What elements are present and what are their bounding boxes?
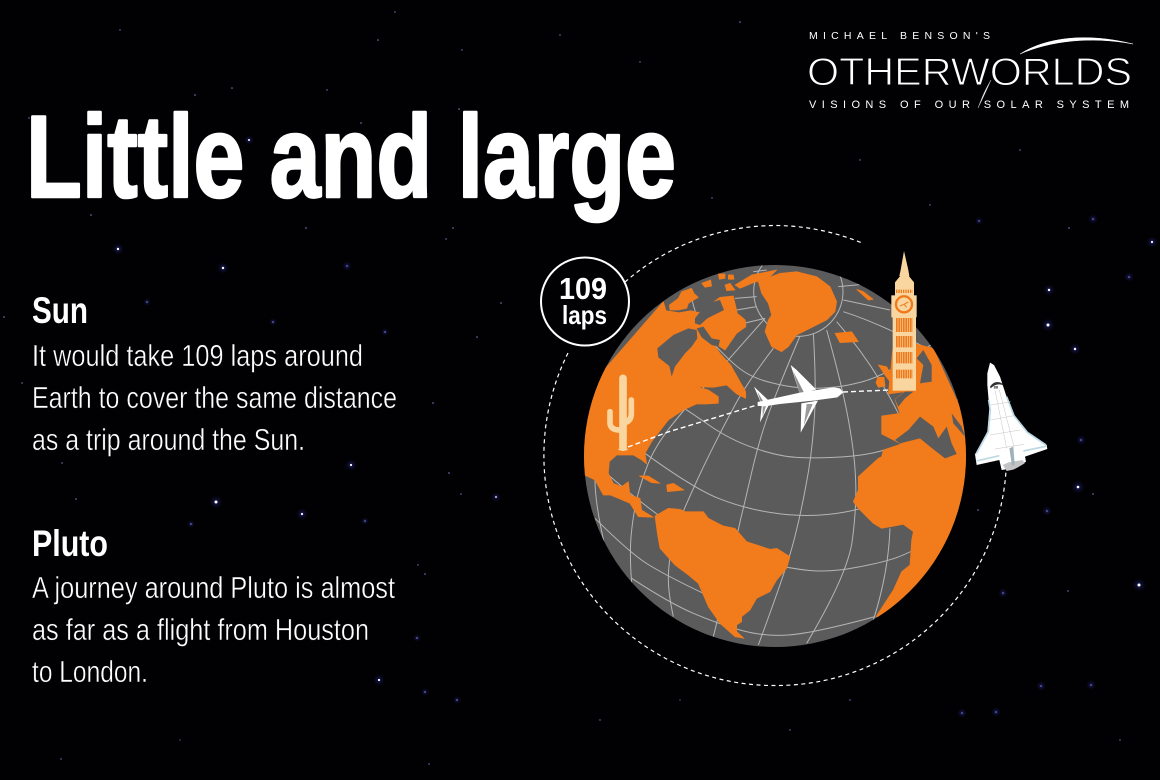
text block: Sun: It would take 109 laps around [32,338,363,373]
Hispaniola [667,483,684,492]
globe: Earth [584,265,966,647]
icon: Big Ben (London) [891,251,917,391]
graticule lines [595,247,963,645]
text block: Pluto: as far as a flight from Houston [32,612,369,647]
callout: 109 laps [541,258,629,346]
logo: Otherworlds: OTHERWORLDS [807,51,1132,94]
callout: 109 laps: 109 [559,271,607,306]
text block: Sun: Earth to cover the same distance [32,380,397,415]
icon: airplane [754,365,843,433]
icon: space shuttle [975,363,1047,471]
text block: Pluto: Pluto [32,523,108,564]
Greenland [758,272,837,352]
land masses [584,270,966,639]
Iceland [835,332,858,343]
logo: Otherworlds: VISIONS OF OUR SOLAR SYSTEM [809,99,1129,111]
icon: cactus (Houston) [610,378,631,449]
text block: Pluto [32,523,395,689]
text block: Sun: Sun [32,290,88,331]
logo: Otherworlds: MICHAEL BENSON'S [809,30,990,42]
flight route: Houston to London [628,390,890,447]
text block: Pluto: to London. [32,654,148,689]
Svalbard [857,289,873,300]
Eurasia [882,343,973,463]
Africa [853,444,966,618]
Great Britain and Ireland [878,364,890,382]
South America [655,508,790,638]
text block: Sun [32,290,397,457]
text block: Sun: as a trip around the Sun. [32,422,305,457]
text block: Pluto: A journey around Pluto is almost [32,570,395,605]
title: Little and large [26,91,676,222]
Cuba [639,476,660,483]
orbit: dashed path around Earth [544,226,1006,686]
logo: Otherworlds [807,30,1133,111]
Arctic islands [669,288,698,310]
callout: 109 laps: laps [562,300,607,330]
icon: space shuttle: 88 [994,384,999,389]
North America [584,296,746,518]
inland seas [657,300,965,458]
